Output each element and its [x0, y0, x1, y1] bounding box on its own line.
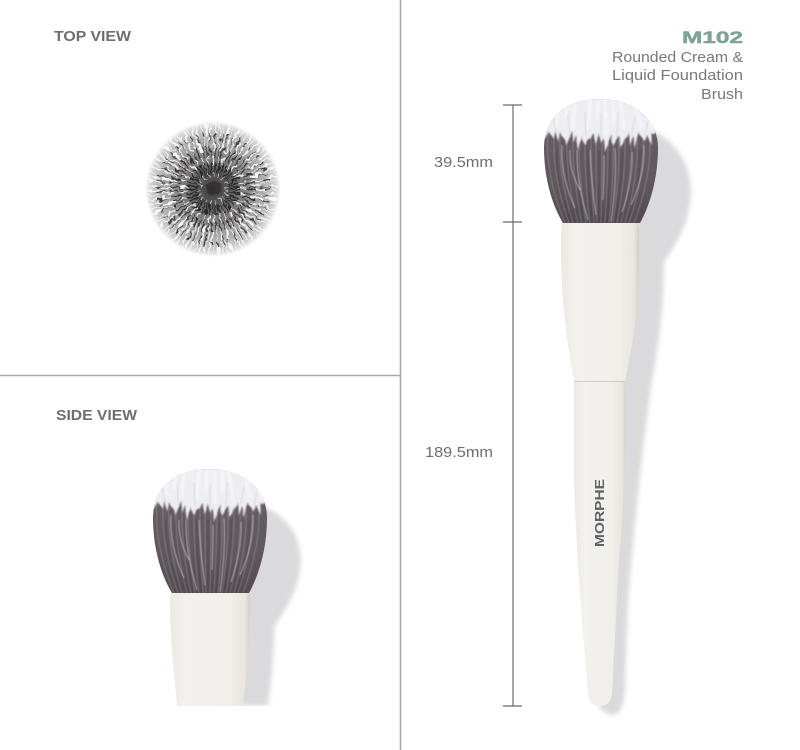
- shadow: side view brush: [230, 505, 301, 706]
- icon: brush top view: [147, 123, 279, 255]
- side view bristles: [139, 455, 281, 595]
- product name: [612, 49, 743, 103]
- dimension label: handle length: 189.5mm: [425, 444, 493, 461]
- heading: top view: TOP VIEW: [54, 29, 131, 45]
- product name: Rounded Cream &: [612, 49, 743, 66]
- ferrule seam: [574, 380, 625, 382]
- icon: full brush: [530, 85, 691, 715]
- side view handle: [170, 592, 250, 706]
- brand label: MORPHE: [593, 479, 607, 547]
- dimension label: head length: 39.5mm: [434, 154, 493, 171]
- brush bristles: [530, 85, 672, 225]
- product name: Brush: [701, 86, 743, 103]
- icon: brush side view: [139, 455, 310, 720]
- panel dividers: [0, 0, 400, 750]
- brush handle lower: [574, 382, 626, 706]
- shadow: full brush: [598, 130, 691, 715]
- heading: side view: SIDE VIEW: [56, 408, 137, 424]
- model code: M102: [682, 28, 743, 47]
- dimension scale: [503, 105, 522, 706]
- title block: [612, 28, 743, 103]
- product name: Liquid Foundation: [612, 67, 743, 84]
- brush ferrule: [561, 223, 639, 381]
